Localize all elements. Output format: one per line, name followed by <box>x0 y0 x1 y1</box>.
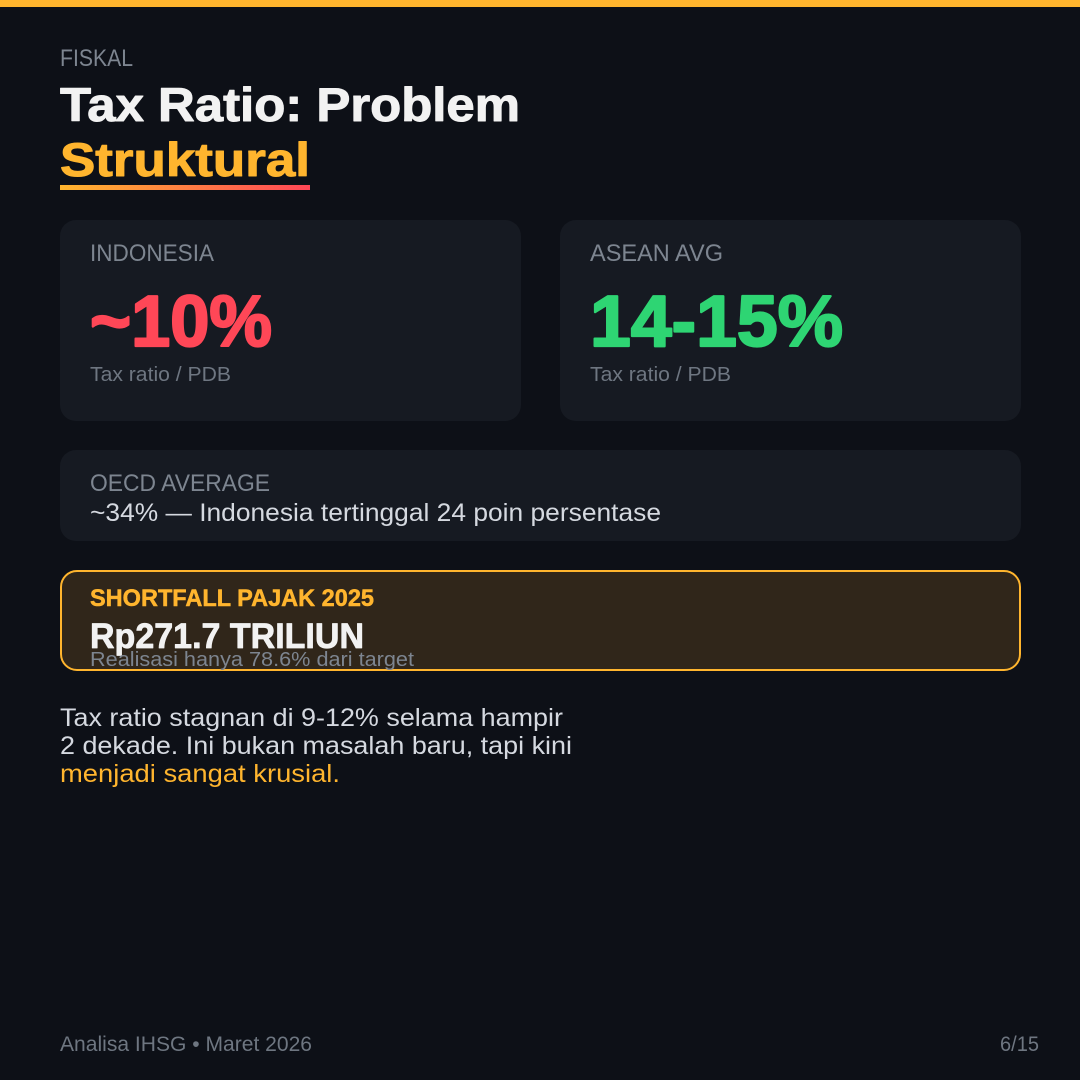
shortfall amount: Rp271.7 TRILIUN <box>90 617 364 656</box>
title: Tax Ratio: Problem <box>60 78 520 131</box>
body paragraph <box>60 704 572 788</box>
body paragraph: 2 dekade. Ini bukan masalah baru, tapi kini <box>60 732 572 760</box>
body paragraph: Tax ratio stagnan di 9-12% selama hampir <box>60 704 563 732</box>
panel: ASEAN average <box>560 220 1021 421</box>
panel: OECD average <box>60 450 1021 541</box>
title <box>60 78 520 190</box>
label: Indonesia: INDONESIA <box>90 240 214 267</box>
page number: 6/15 <box>1000 1033 1039 1056</box>
caption: ASEAN: Tax ratio / PDB <box>590 364 731 386</box>
value: ASEAN tax ratio: 14-15% <box>590 282 843 362</box>
label: ASEAN: ASEAN AVG <box>590 240 723 267</box>
shortfall label: SHORTFALL PAJAK 2025 <box>90 585 374 612</box>
body paragraph: menjadi sangat krusial. <box>60 760 340 788</box>
label: OECD: OECD AVERAGE <box>90 470 270 497</box>
OECD comparison text: ~34% — Indonesia tertinggal 24 poin persentase <box>90 499 661 527</box>
title: Struktural <box>60 133 310 186</box>
caption: Indonesia: Tax ratio / PDB <box>90 364 231 386</box>
shortfall note: Realisasi hanya 78.6% dari target <box>90 649 414 671</box>
value: Indonesia tax ratio: ~10% <box>90 282 272 362</box>
footer source: Analisa IHSG • Maret 2026 <box>60 1033 312 1056</box>
panel: Indonesia <box>60 220 521 421</box>
category label: FISKAL <box>60 45 133 72</box>
panel: shortfall callout <box>61 571 1020 671</box>
top accent bar <box>0 0 1080 7</box>
